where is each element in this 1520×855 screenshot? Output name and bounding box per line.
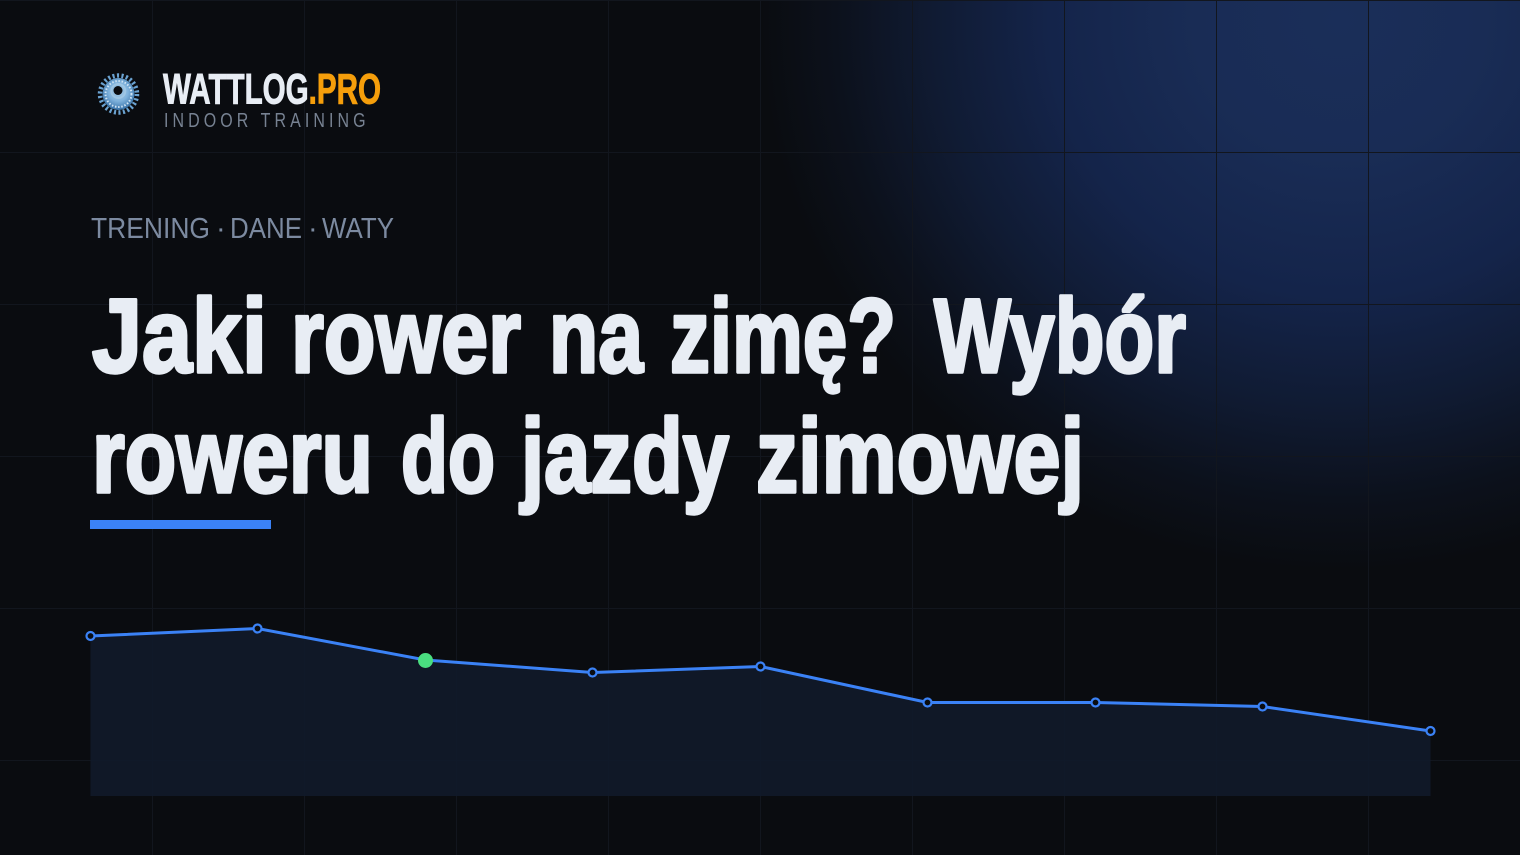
icon: cassette gear bbox=[100, 76, 137, 112]
title bbox=[92, 278, 1186, 515]
title: roweru bbox=[92, 398, 373, 515]
title: Wybór bbox=[934, 278, 1186, 395]
eyebrow: DANE bbox=[230, 213, 302, 245]
eyebrow: WATY bbox=[322, 213, 394, 245]
title: do bbox=[401, 398, 495, 515]
eyebrow: TRENING bbox=[91, 213, 210, 245]
eyebrow: · bbox=[308, 213, 318, 245]
title: Jaki bbox=[92, 278, 267, 395]
highlighted data point bbox=[418, 653, 433, 668]
line chart bbox=[86, 624, 1434, 796]
eyebrow: · bbox=[216, 213, 226, 245]
tagline: INDOOR TRAINING bbox=[164, 109, 366, 131]
data points bbox=[86, 624, 1434, 735]
title: zimę? bbox=[670, 278, 896, 395]
chart area bbox=[90, 628, 1430, 796]
title: jazdy bbox=[519, 398, 729, 515]
title: rower bbox=[291, 278, 521, 395]
logo bbox=[100, 66, 381, 131]
title: zimowej bbox=[756, 398, 1084, 515]
chart line bbox=[90, 628, 1430, 731]
title underline bbox=[90, 520, 271, 529]
wordmark: WATTLOG.PRO bbox=[163, 66, 381, 114]
title: na bbox=[549, 278, 644, 395]
